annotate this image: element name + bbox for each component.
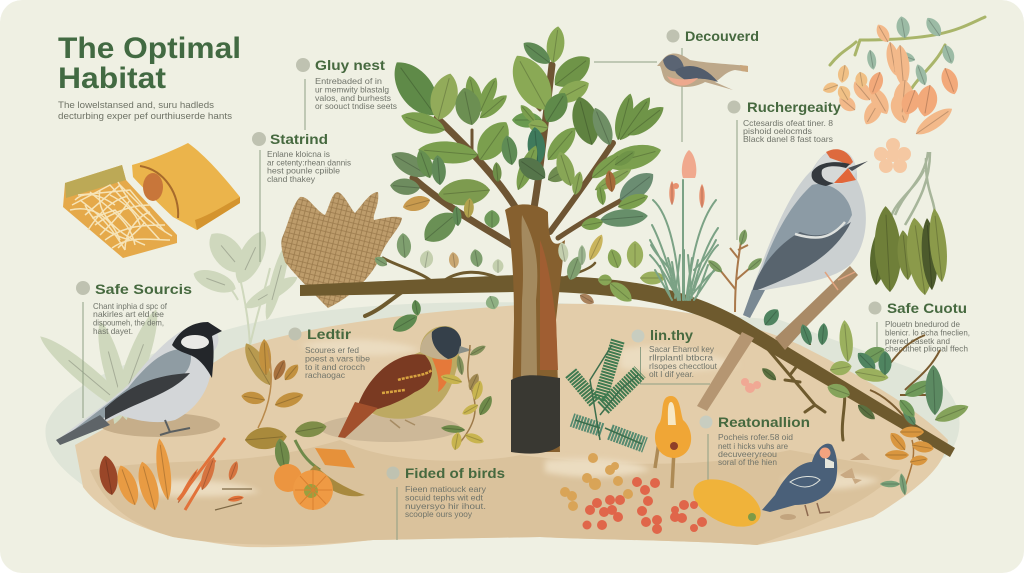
label: Gluy nest: ur memwity blastalg (315, 86, 389, 94)
label: Safe Cuotu (868, 300, 970, 354)
subtitle: The lowelstansed and, suru hadleds (58, 100, 214, 111)
label: Ledtir (288, 326, 370, 380)
icon: sprig beside sparrow (440, 343, 495, 451)
label: Safe Cuotu: Plouetn bnedurod de (885, 320, 960, 329)
label: lin.thy: olt I dif year. (649, 370, 694, 379)
label: Statrind: cland thakey (267, 175, 316, 184)
icon: leafy twigs on right (760, 305, 971, 440)
subtitle: decturbing exper pef ourthiuserde hants (58, 111, 232, 122)
label: lin.thy (632, 327, 718, 379)
ground (75, 304, 948, 547)
label: lin.thy: lin.thy (650, 327, 693, 343)
corner mask (0, 0, 1024, 22)
icon: brown sparrow (338, 326, 472, 438)
tree (300, 25, 955, 457)
label: Gluy nest: Gluy nest (315, 57, 385, 73)
label: Statrind: ar cetenty:rhean dannis (267, 158, 351, 168)
icon: orange fruit and acorns (244, 419, 365, 510)
label: Statrind: Statrind (270, 131, 328, 147)
label: Gluy nest: valos, and burhests (315, 94, 391, 103)
pale ground halo (45, 302, 960, 520)
low leaves on branch (396, 232, 412, 259)
label: Reatonallion (700, 414, 810, 467)
label: Ledtir: to it and crocch (305, 363, 365, 372)
label: Reatonallion: decuveeryreou (718, 450, 777, 459)
label: Fided of birds (386, 465, 505, 519)
label: Reatonallion: nett i hicks vuhs are (718, 442, 788, 451)
label: Safe Sourcis: hast dayet. (93, 327, 133, 336)
label: Ledtir: poest a vars tibe (305, 354, 370, 364)
icon: blue bird on ground (762, 444, 837, 516)
label: Ruchergeaity (728, 99, 841, 144)
label: Statrind: hest pounle cpiible (267, 166, 340, 176)
label: Safe Cuotu: prered easetk and (885, 337, 950, 346)
icon: spiky flowering plant (650, 150, 718, 300)
icon: flowering branch (821, 15, 985, 140)
title: Habitat (58, 62, 166, 95)
icon: pebbles and small flower on ground (741, 378, 870, 520)
icon: pink flower (874, 138, 911, 173)
label: Reatonallion: Reatonallion (718, 414, 810, 430)
label: Fided of birds: scoople ours yooy (405, 510, 473, 519)
faded background plants (61, 239, 286, 399)
icon: black-capped chickadee (56, 322, 222, 445)
label: Gluy nest (296, 57, 397, 111)
perch branch (697, 266, 858, 411)
label: Reatonallion: Pocheis rofer.58 oid (718, 433, 793, 442)
icon: yellow squash (686, 470, 768, 536)
lower twigs (365, 258, 845, 440)
trunk (505, 204, 565, 452)
label: Statrind (252, 131, 351, 184)
label: lin.thy: Sacar Eharrol key (649, 345, 715, 354)
label: Safe Sourcis: Safe Sourcis (95, 281, 192, 297)
label: Safe Sourcis: nakirles art eld tee (93, 310, 164, 319)
icon: seeds and berries (560, 453, 707, 534)
label: Decouverd: Decouverd (685, 28, 759, 44)
icon: small tan stem near bird (706, 229, 764, 312)
icon: woven burlap nest (281, 192, 402, 308)
label: Ruchergeaity: Ruchergeaity (747, 99, 841, 115)
main horizontal branch (300, 275, 955, 457)
label: Fided of birds: nuyersyo hir ihout. (405, 502, 486, 511)
label: Ledtir: rachaogac (305, 371, 345, 380)
title: The Optimal (58, 32, 241, 65)
label: Safe Cuotu: blenicr. lo echa fneclien, (885, 328, 970, 338)
label: Ruchergeaity: pishoid oelocmds (743, 127, 812, 136)
label: Safe Sourcis: Chant inphia d spc of (93, 302, 168, 311)
icon: hanging pods (867, 152, 950, 297)
leaves (373, 25, 668, 336)
title (58, 32, 241, 95)
label: lin.thy: rIsopes checctlout (649, 362, 718, 371)
icon: fallen autumn leaves (96, 339, 305, 512)
label: Ledtir: Scoures er fed (305, 346, 359, 355)
icon: grey songbird (743, 149, 868, 318)
icon: fern (570, 340, 645, 445)
label: Ledtir: Ledtir (307, 326, 352, 342)
label: Fided of birds: socuid tephs wit edt (405, 494, 484, 502)
icon: noodle nest material slab (63, 165, 177, 258)
subtitle (58, 100, 232, 122)
branches (413, 65, 622, 248)
label: Fided of birds: Fieen matiouck eary (405, 485, 487, 494)
label: Ruchergeaity: Cctesardis ofeat tiner. 8 (743, 119, 833, 128)
label: Gluy nest: or soouct tndise seets (315, 102, 397, 111)
label: Reatonallion: soral of the hien (718, 458, 777, 467)
label: lin.thy: rllrplantl btbcra (649, 354, 714, 362)
icon: orange gourd (655, 396, 691, 488)
label: Safe Sourcis: dispoumeh, the dem, (93, 318, 164, 328)
label: Safe Sourcis (76, 281, 192, 336)
icon: small flying bird (657, 54, 748, 90)
lines (83, 48, 877, 540)
label: Fided of birds: Fided of birds (405, 465, 505, 481)
icon: amber sprig (880, 427, 935, 496)
label: Safe Cuotu: checuthet plional ffech (885, 344, 968, 354)
label: Gluy nest: Entrebaded of in (315, 77, 382, 86)
icon: folded nest material slab (132, 143, 240, 230)
label: Ruchergeaity: Black danel 8 fast toars (743, 135, 833, 144)
label: Safe Cuotu: Safe Cuotu (887, 300, 967, 316)
label: Statrind: Enlane kloicna is (267, 150, 330, 159)
